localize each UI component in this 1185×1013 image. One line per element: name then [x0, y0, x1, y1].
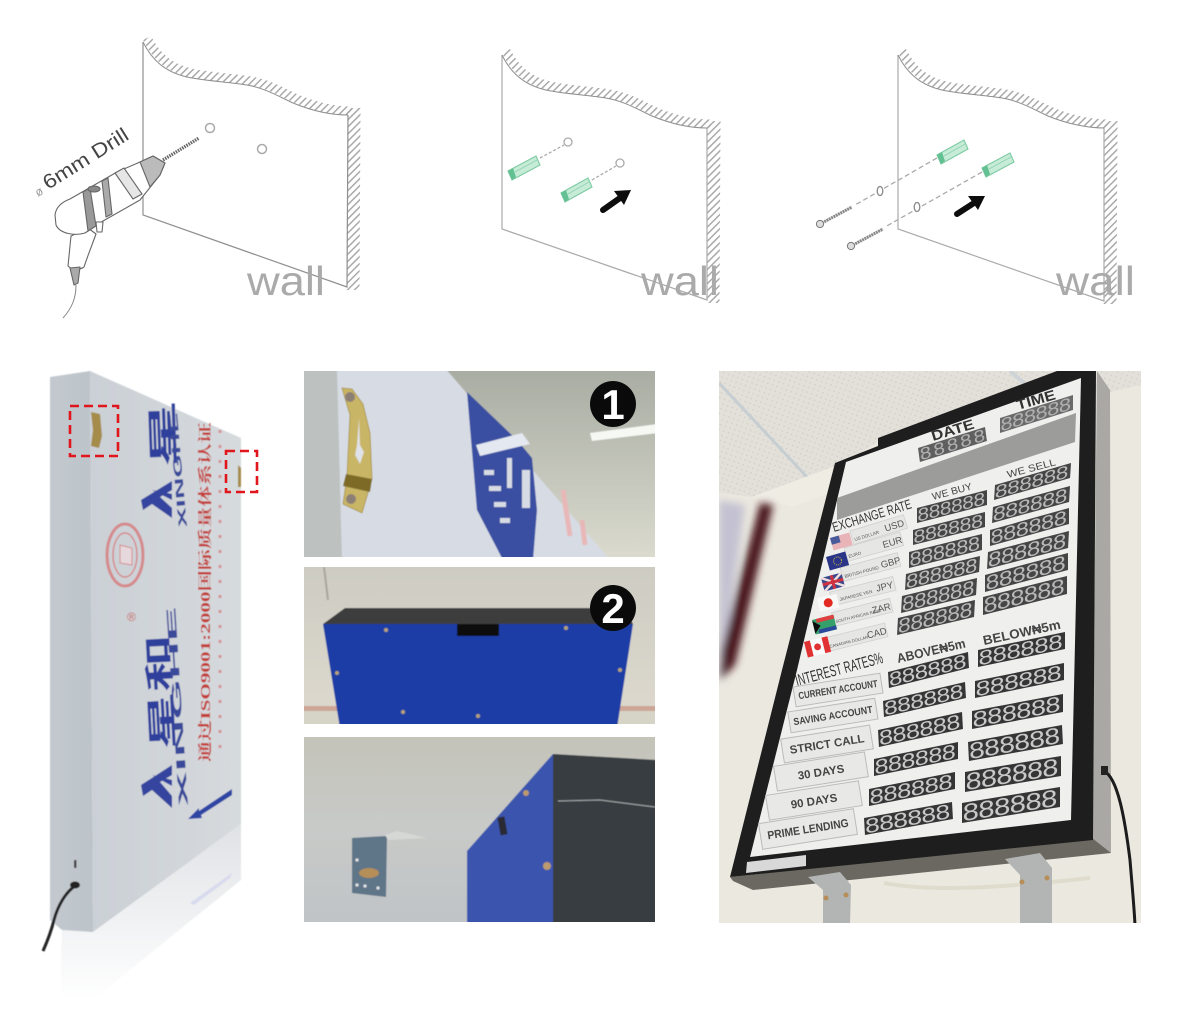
- below displays: 888888: [975, 662, 1062, 704]
- drill size label: 6mm Drill: [39, 124, 133, 194]
- we buy displays: 888888: [913, 512, 984, 550]
- below column label: BELOW₦5m: [982, 617, 1062, 648]
- box top edge: [323, 608, 633, 624]
- we sell label: WE SELL: [1006, 457, 1058, 481]
- red dotted column: [218, 430, 222, 750]
- bracket flange: [385, 831, 427, 840]
- exchange rate heading: EXCHANGE RATE: [830, 497, 913, 535]
- strict call: STRICT CALL: [789, 733, 865, 757]
- wall label: wall: [640, 258, 719, 304]
- selector knob: [88, 186, 100, 192]
- blue arrow: [188, 789, 232, 819]
- screw 1: [816, 207, 852, 228]
- ceiling tiles: [715, 365, 1145, 497]
- slot on box: [497, 816, 508, 835]
- black arrow: [957, 196, 985, 214]
- we sell displays: 888888: [983, 575, 1065, 621]
- drill holes: [206, 124, 266, 154]
- 90 days: [766, 781, 862, 820]
- lower brand name: XINGHE: [163, 605, 191, 807]
- wall outline: [143, 42, 348, 287]
- right mounting bracket: [1005, 853, 1052, 925]
- currency rows: [825, 515, 908, 651]
- blue logo fragment: [467, 392, 537, 560]
- flag: South Africa: [812, 615, 837, 635]
- wall stain band: [300, 706, 660, 711]
- flag: European Union: [826, 551, 849, 570]
- interest rates heading: INTEREST RATES%: [794, 650, 885, 690]
- 30 days: 30 DAYS: [797, 763, 846, 783]
- ZAR row: [831, 598, 893, 626]
- JPY row: JAPANESE YEN: [839, 589, 873, 602]
- logo slits: [484, 458, 530, 523]
- board white face: [750, 378, 1081, 857]
- drill diameter symbol: ø: [32, 183, 46, 200]
- we sell displays: [983, 462, 1071, 621]
- wall top edge: [143, 42, 348, 115]
- we buy displays: 888888: [901, 577, 976, 618]
- current account: [793, 673, 883, 707]
- hanging hook 1: [91, 412, 102, 448]
- wall side hatching: [713, 121, 714, 303]
- prime lending: PRIME LENDING: [767, 818, 850, 842]
- wall crack: [324, 567, 328, 600]
- red dashed highlight 1: [70, 406, 118, 456]
- strict call: [781, 725, 873, 763]
- wall outline: [898, 55, 1104, 301]
- wall label: wall: [1055, 258, 1135, 304]
- green wall plug 2: [561, 178, 592, 202]
- USD row: [850, 515, 908, 544]
- upper brand name: XINGHE: [166, 412, 190, 528]
- number badge 1: 1: [601, 381, 625, 428]
- we sell displays: 888888: [994, 462, 1070, 505]
- wall outline: [502, 55, 707, 300]
- green wall plug 1: [937, 140, 968, 164]
- wall background: [300, 560, 660, 730]
- green wall plug 2: [982, 153, 1014, 177]
- we sell displays: 888888: [985, 552, 1066, 598]
- chuck: [140, 156, 165, 187]
- we buy displays: 888888: [905, 555, 979, 595]
- power cable: [43, 886, 75, 951]
- number badge 2: [590, 585, 636, 632]
- flag: United States: [830, 532, 853, 550]
- wall top hatching: [147, 38, 352, 111]
- USD row: US DOLLAR: [854, 529, 880, 542]
- JPY row: [830, 577, 896, 606]
- wall background: [300, 730, 660, 925]
- wall background: [715, 365, 1145, 930]
- number badge 1: [590, 381, 636, 428]
- step 3: screws diagram: [816, 51, 1135, 304]
- EUR row: EURO: [848, 550, 862, 559]
- registered mark: ®: [127, 610, 136, 624]
- 90 days: 90 DAYS: [790, 792, 839, 812]
- upper blue brand mark: 星: [146, 400, 182, 468]
- JPY row: JPY: [875, 580, 895, 595]
- trigger: [96, 222, 103, 232]
- above displays: 888888: [864, 801, 952, 841]
- time label: TIME: [1014, 386, 1057, 413]
- drill cord: [63, 285, 76, 318]
- time display: 888888: [1000, 395, 1072, 438]
- handle: [68, 228, 96, 269]
- ceiling background: [300, 368, 660, 563]
- cable socket: [1101, 766, 1108, 775]
- back of display box photo: [43, 371, 241, 1000]
- CAD row: [825, 623, 888, 651]
- photo 3: wall bracket close-up: [304, 737, 655, 922]
- above displays: 888888: [874, 741, 956, 782]
- red dashed highlight 2: [226, 451, 257, 492]
- wall top edge: [898, 55, 1104, 128]
- above displays: [864, 650, 969, 841]
- EUR row: EUR: [881, 535, 904, 551]
- red certification text: 通过ISO9001:2000国际质量体系认证: [197, 422, 214, 762]
- collar: [115, 168, 142, 199]
- we buy displays: 888888: [909, 533, 981, 573]
- prime lending: [759, 809, 857, 849]
- sticker: [746, 855, 806, 873]
- hole 1 with dashed guide: [540, 138, 572, 158]
- reflected arrow: [190, 873, 232, 905]
- ceiling light: [590, 424, 658, 441]
- ZAR row: ZAR: [871, 601, 892, 617]
- above column label: ABOVE₦5m: [895, 636, 967, 666]
- photo 2: keyhole slot close-up: [304, 567, 655, 724]
- left mounting bracket: [808, 872, 851, 925]
- flag: United Kingdom: [821, 573, 845, 592]
- EUR row: [844, 532, 904, 561]
- above displays: 888888: [883, 680, 965, 722]
- blurred foreground object: [719, 500, 773, 680]
- rear grip band: [83, 188, 96, 231]
- barrel: [55, 156, 165, 234]
- drill body: [55, 156, 165, 285]
- wall label: wall: [246, 258, 325, 304]
- we sell displays: 888888: [987, 530, 1067, 574]
- front grip band: [102, 178, 112, 217]
- box screws: [523, 790, 551, 870]
- dark box end: [553, 754, 658, 925]
- lower blue brand mark: 星和: [141, 633, 180, 750]
- blue box face: [323, 624, 633, 728]
- ceiling strip: [719, 383, 807, 477]
- bracket holes: [355, 858, 380, 890]
- scrolling message strip: [837, 413, 1076, 520]
- bracket plate: [352, 836, 387, 897]
- hook keyhole slot: [355, 418, 364, 464]
- box side strip: [300, 368, 342, 560]
- cord boot: [70, 267, 80, 285]
- black slot: [457, 624, 499, 636]
- below displays: [962, 631, 1065, 830]
- above displays: 888888: [869, 771, 953, 812]
- board side: [1092, 371, 1111, 853]
- we buy label: WE BUY: [931, 482, 974, 503]
- lower brand logo: [141, 765, 172, 808]
- upper brand logo: [141, 481, 172, 518]
- flag: Japan: [817, 594, 839, 612]
- hook lower bend: [343, 474, 372, 492]
- brass hanging hook: [342, 388, 372, 513]
- screw 2: [847, 229, 883, 250]
- date display: 88888: [918, 426, 987, 466]
- GBP row: GBP: [880, 555, 902, 571]
- we sell displays: 888888: [992, 485, 1069, 528]
- black arrow: [603, 190, 631, 210]
- CAD row: CANADIAN DOLLAR: [829, 635, 869, 649]
- step 2: wall plugs diagram: [502, 51, 719, 304]
- green wall plug 1: [508, 156, 540, 180]
- board lower edge: [730, 838, 1111, 890]
- interest rate labels: [759, 673, 883, 849]
- step 1: drilling diagram: [32, 38, 354, 318]
- switch detail: [74, 860, 76, 868]
- hanging hook 2: [238, 465, 241, 487]
- drill bit: [163, 138, 199, 160]
- box side: [50, 371, 93, 932]
- flag: Canada: [804, 636, 831, 658]
- number badge 2: 2: [601, 585, 625, 632]
- glossy highlight: [476, 433, 530, 456]
- saving account: [788, 698, 878, 733]
- hole 2 with dashed guide: [592, 159, 624, 180]
- power socket: [70, 882, 80, 888]
- blue box side: [467, 754, 553, 925]
- USD row: USD: [883, 518, 906, 535]
- current account: CURRENT ACCOUNT: [798, 679, 878, 702]
- hook screws: [345, 392, 356, 504]
- bracket bolt: [359, 868, 379, 878]
- we sell displays: 888888: [990, 506, 1067, 551]
- wall top hatching: [902, 51, 1108, 124]
- below displays: 888888: [978, 631, 1063, 673]
- ceiling texture: [715, 365, 1145, 497]
- above displays: 888888: [878, 711, 962, 753]
- 30 days: [774, 752, 868, 791]
- CAD row: CAD: [866, 626, 888, 641]
- box back face: [90, 371, 241, 932]
- saving account: SAVING ACCOUNT: [793, 705, 873, 728]
- crack line: [558, 800, 655, 807]
- below displays: 888888: [968, 723, 1061, 767]
- GBP row: BRITISH POUND: [844, 565, 880, 579]
- photo 4: installed display board: [719, 371, 1141, 923]
- we buy displays: [897, 489, 987, 640]
- red print smears: [563, 490, 585, 545]
- box screws: [335, 626, 622, 718]
- below displays: 888888: [962, 786, 1058, 830]
- we buy displays: 888888: [917, 489, 986, 528]
- cornice moulding: [752, 466, 835, 507]
- board black frame: [730, 371, 1096, 877]
- power cable: [1104, 771, 1135, 925]
- wall side hatching: [1110, 121, 1111, 304]
- box back panel: [300, 368, 610, 560]
- date label: DATE: [929, 416, 976, 444]
- red certification seal: [107, 524, 143, 586]
- wall top hatching: [506, 51, 711, 124]
- below displays: 888888: [972, 692, 1061, 735]
- ZAR row: SOUTH AFRICAN RAND: [835, 608, 882, 624]
- GBP row: [840, 552, 902, 581]
- wall top edge: [502, 55, 707, 128]
- floor reflection: [60, 824, 241, 1000]
- above displays: 888888: [888, 650, 968, 693]
- photo 1: hook close-up: [304, 371, 655, 557]
- wall holes: [877, 186, 920, 212]
- cable tie: [884, 878, 1090, 888]
- ceiling strip 2: [1010, 371, 1030, 388]
- below displays: 888888: [965, 754, 1059, 799]
- dashed guide lines: [855, 158, 982, 227]
- we buy displays: 888888: [897, 598, 974, 640]
- wall side hatching: [353, 108, 354, 290]
